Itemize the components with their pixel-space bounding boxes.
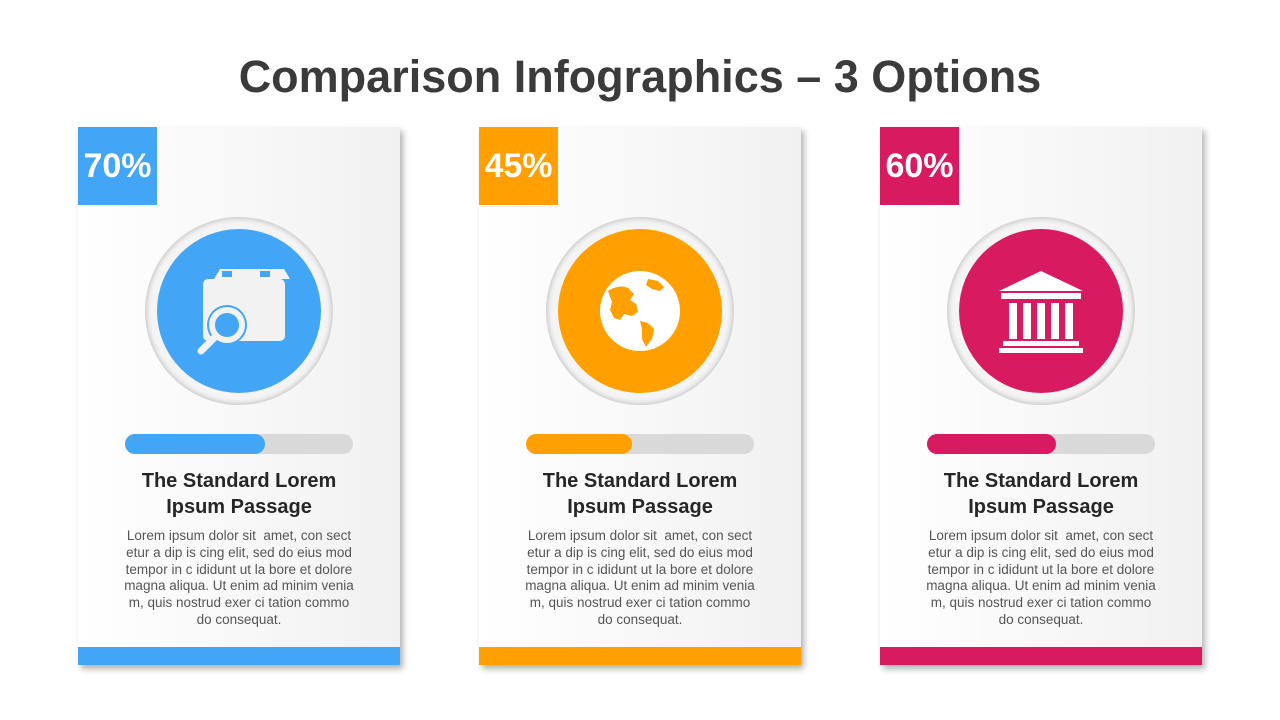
body text: Lorem ipsum dolor sit amet, con sect bbox=[127, 528, 351, 543]
badge: 70% bbox=[78, 127, 157, 205]
body text: etur a dip is cing elit, sed do eius mod bbox=[527, 545, 753, 560]
progress bar 45% bbox=[526, 434, 754, 454]
badge: 60% bbox=[880, 127, 959, 205]
icon: box with magnifier bbox=[145, 217, 333, 405]
body text: magna aliqua. Ut enim ad minim venia bbox=[926, 578, 1156, 593]
body text: magna aliqua. Ut enim ad minim venia bbox=[525, 578, 755, 593]
panel: option 3 bbox=[880, 127, 1202, 665]
heading: The Standard Lorem bbox=[944, 470, 1138, 492]
panel: option 1 bbox=[78, 127, 400, 665]
body text: m, quis nostrud exer ci tation commo bbox=[931, 595, 1151, 610]
body text bbox=[124, 528, 354, 627]
panel: option 2 bbox=[479, 127, 801, 665]
body text: tempor in c ididunt ut la bore et dolore bbox=[527, 562, 753, 577]
body text: do consequat. bbox=[598, 612, 682, 627]
heading: The Standard Lorem bbox=[142, 470, 336, 492]
progress bar 60% bbox=[927, 434, 1155, 454]
heading bbox=[542, 470, 737, 518]
body text bbox=[525, 528, 755, 627]
heading: Ipsum Passage bbox=[166, 496, 312, 518]
icon: globe bbox=[546, 217, 734, 405]
body text: magna aliqua. Ut enim ad minim venia bbox=[124, 578, 354, 593]
body text: m, quis nostrud exer ci tation commo bbox=[129, 595, 349, 610]
body text: etur a dip is cing elit, sed do eius mod bbox=[126, 545, 352, 560]
body text: tempor in c ididunt ut la bore et dolore bbox=[928, 562, 1154, 577]
badge: 70%: 70% bbox=[83, 147, 152, 185]
body text: m, quis nostrud exer ci tation commo bbox=[530, 595, 750, 610]
badge: 45% bbox=[479, 127, 558, 205]
heading bbox=[142, 470, 336, 518]
progress bar 70% bbox=[125, 434, 353, 454]
body text: Lorem ipsum dolor sit amet, con sect bbox=[528, 528, 752, 543]
heading bbox=[944, 470, 1138, 518]
heading: Ipsum Passage bbox=[968, 496, 1114, 518]
heading: Ipsum Passage bbox=[567, 496, 713, 518]
badge: 60%: 60% bbox=[885, 147, 954, 185]
body text: do consequat. bbox=[197, 612, 281, 627]
body text: tempor in c ididunt ut la bore et dolore bbox=[126, 562, 352, 577]
heading: The Standard Lorem bbox=[543, 470, 737, 492]
body text: etur a dip is cing elit, sed do eius mod bbox=[928, 545, 1154, 560]
body text: Lorem ipsum dolor sit amet, con sect bbox=[929, 528, 1153, 543]
body text bbox=[926, 528, 1156, 627]
title: Comparison Infographics – 3 Options bbox=[239, 51, 1041, 102]
body text: do consequat. bbox=[999, 612, 1083, 627]
icon: bank building bbox=[947, 217, 1135, 405]
badge: 45%: 45% bbox=[484, 147, 553, 185]
